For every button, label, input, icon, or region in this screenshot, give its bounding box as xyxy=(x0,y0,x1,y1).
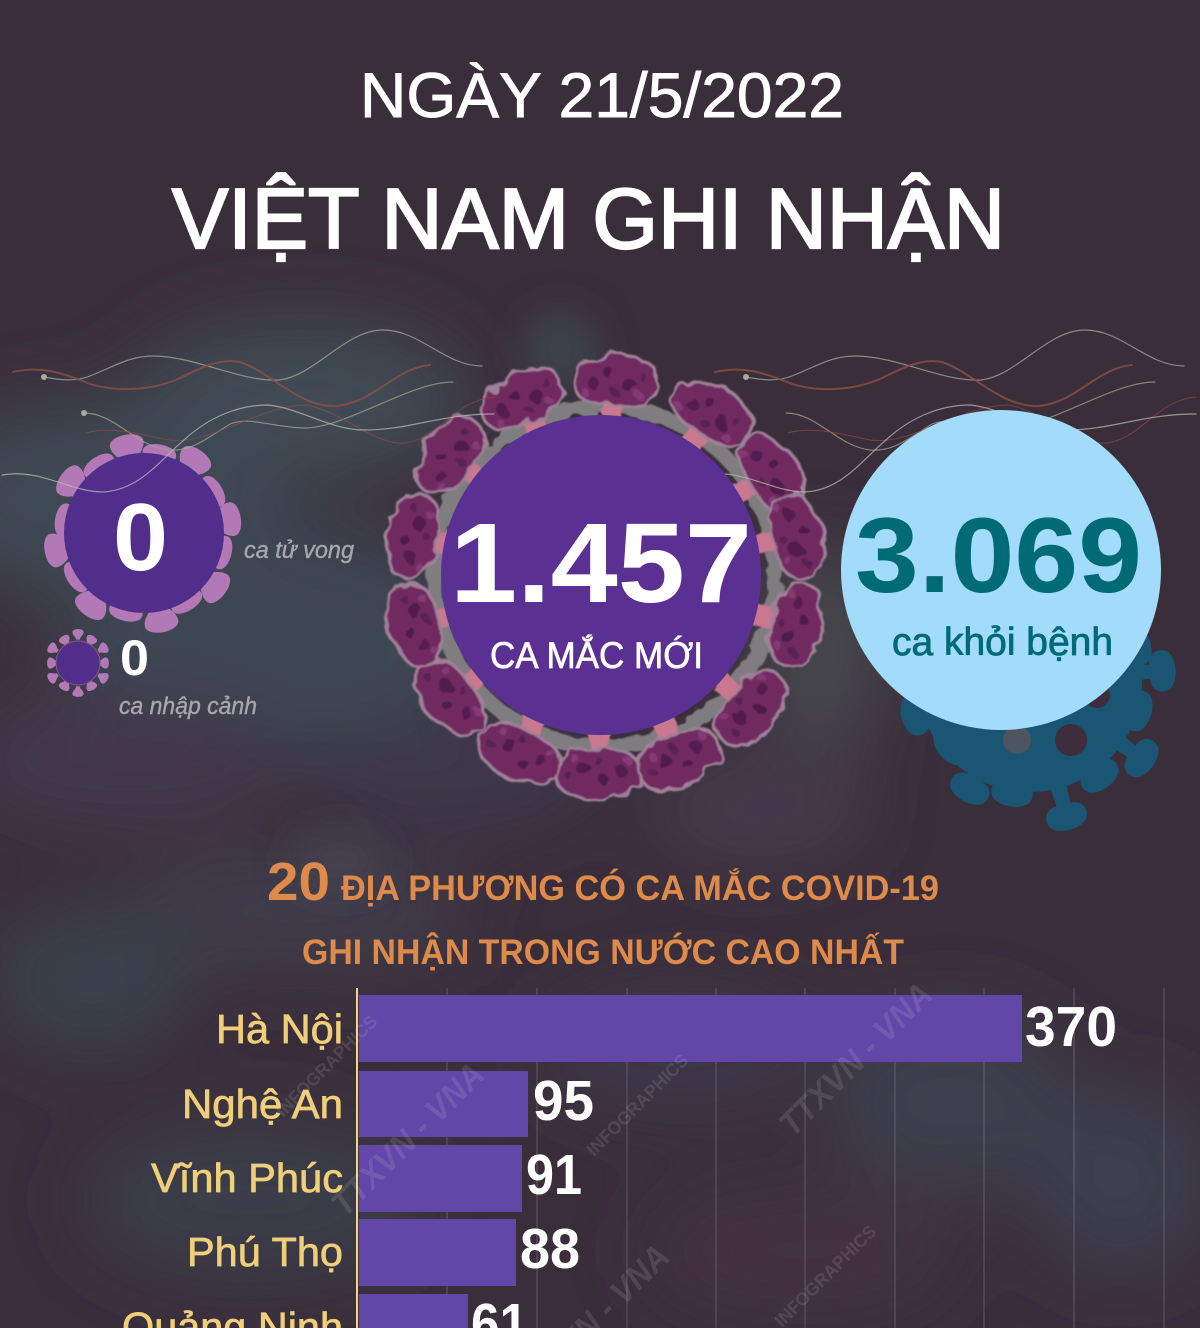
bar: Quảng Ninh xyxy=(122,1292,528,1328)
panel: new cases xyxy=(441,415,761,735)
bar chart xyxy=(122,988,1164,1328)
panel: deaths: 0 xyxy=(113,484,168,591)
panel: new cases: 1.457 xyxy=(450,500,752,626)
bar: Nghệ An: Nghệ An xyxy=(182,1081,343,1127)
watermarks: INFOGRAPHICS xyxy=(771,1221,880,1328)
bar: Nghệ An: 95 xyxy=(533,1069,594,1133)
bar: Vĩnh Phúc: 91 xyxy=(526,1143,582,1207)
watermarks xyxy=(272,975,940,1328)
chart heading xyxy=(267,852,939,972)
title: date: NGÀY 21/5/2022 xyxy=(360,61,844,131)
icon: small purple virus with pink spikes xyxy=(42,432,243,635)
panel: recovered: 3.069 xyxy=(855,495,1142,615)
icon: large coronavirus with spikes xyxy=(375,349,835,804)
panel: imported cases xyxy=(46,629,149,697)
bar: Hà Nội xyxy=(216,995,1117,1062)
watermarks: INFOGRAPHICS xyxy=(272,1011,381,1121)
panel: imported cases: 0 xyxy=(120,630,149,686)
bar: Vĩnh Phúc xyxy=(151,1143,582,1212)
chart heading: 20 xyxy=(267,852,330,912)
bar: Phú Thọ: 88 xyxy=(520,1217,580,1281)
bar: Phú Thọ: Phú Thọ xyxy=(187,1229,343,1275)
bar: Hà Nội: Hà Nội xyxy=(216,1006,343,1052)
panel: recovered xyxy=(841,410,1161,730)
chart heading: ĐỊA PHƯƠNG CÓ CA MẮC COVID-19 xyxy=(341,868,939,908)
bar: Phú Thọ xyxy=(187,1217,580,1286)
label: imported cases: ca nhập cảnh xyxy=(119,693,257,720)
bar: Nghệ An xyxy=(182,1069,594,1137)
panel: new cases: CA MẮC MỚI xyxy=(490,634,703,676)
watermarks: TTXVN - VNA xyxy=(324,1055,492,1224)
bar: Hà Nội: 370 xyxy=(1025,995,1117,1059)
panel: deaths xyxy=(42,432,243,635)
icon: blue virus xyxy=(896,568,1177,835)
watermarks: INFOGRAPHICS xyxy=(583,1050,692,1160)
label: deaths: ca tử vong xyxy=(244,537,355,564)
bar: Vĩnh Phúc: Vĩnh Phúc xyxy=(151,1155,343,1201)
panel: recovered: ca khỏi bệnh xyxy=(892,621,1113,664)
watermarks: TTXVN - VNA xyxy=(772,975,940,1144)
title: headline: VIỆT NAM GHI NHẬN xyxy=(172,172,1005,267)
icon: tiny virus xyxy=(46,629,110,697)
chart heading: GHI NHẬN TRONG NƯỚC CAO NHẤT xyxy=(302,932,904,972)
decorative wavy strands left and right xyxy=(2,330,1196,492)
